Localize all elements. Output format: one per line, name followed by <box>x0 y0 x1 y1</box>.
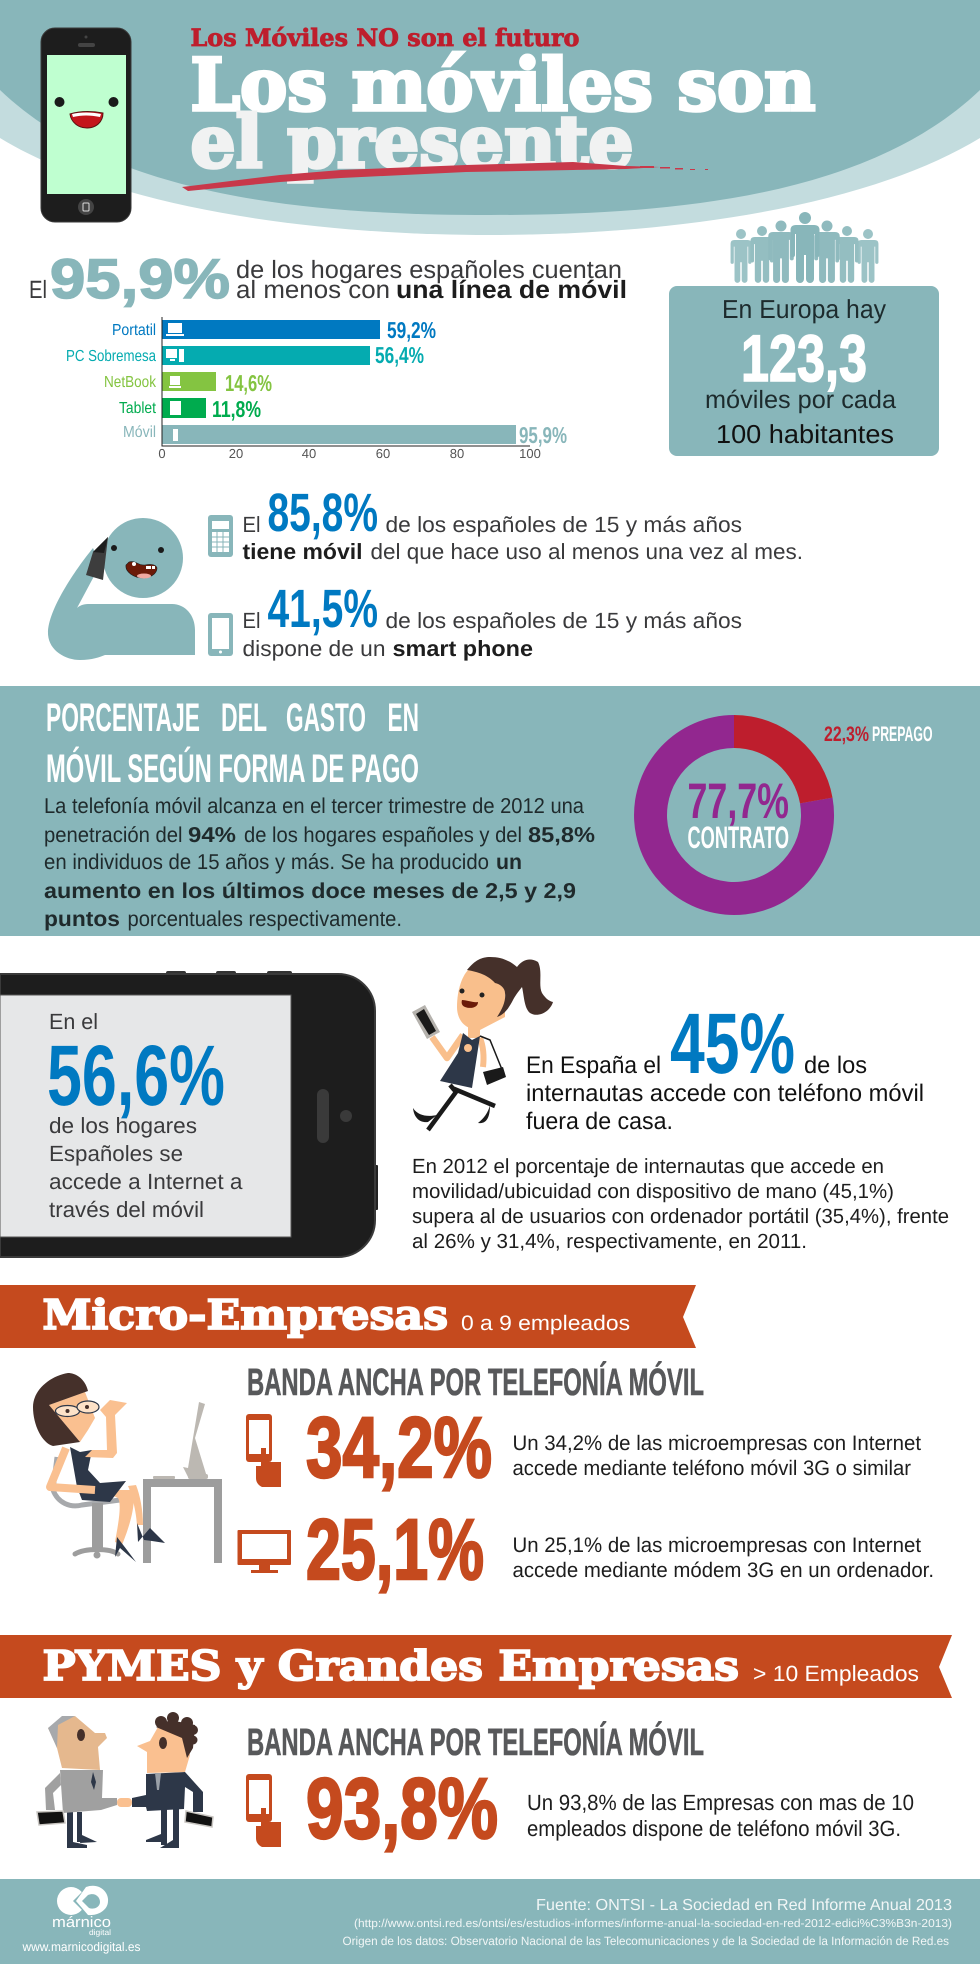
bar chart: devices: 0 <box>158 446 166 461</box>
bar chart: devices: 80 <box>450 446 464 461</box>
bar chart: devices: NetBook <box>104 374 157 391</box>
bar chart: devices: 100 <box>519 446 541 461</box>
bar chart: devices: Móvil <box>123 424 156 441</box>
bar chart: devices: 40 <box>302 446 316 461</box>
illustration: landscape phone <box>0 971 378 1257</box>
text block: 56,6% homes: 56,6% <box>47 1028 225 1124</box>
stat: 41,5% <box>242 579 742 661</box>
stat: 41,5%: dispone de un <box>242 636 386 661</box>
text block: 2012 comparison: En 2012 el porcentaje de internautas que accede en <box>412 1155 884 1178</box>
stat: 93,8%: 93,8% <box>306 1761 498 1857</box>
logo: marnico digital <box>22 1886 141 1954</box>
illustration: woman at desk <box>33 1373 222 1563</box>
stat: 41,5%: El <box>242 608 260 633</box>
panel: Europe stat: móviles por cada <box>705 386 896 414</box>
bar chart: devices: PC Sobremesa <box>66 348 156 365</box>
donut chart: contract vs prepaid: PREPAGO <box>872 723 932 746</box>
bar chart: devices: 20 <box>229 446 243 461</box>
panel: Europe stat: 123,3 <box>741 321 867 395</box>
text block: payment paragraph: 94% <box>188 823 236 847</box>
heading: payment type: MÓVIL SEGÚN FORMA DE PAGO <box>46 746 419 791</box>
text block: payment paragraph: La telefonía móvil alcanza en el tercer trimestre de 2012 una <box>44 794 584 818</box>
panel: Europe stat: 100 habitantes <box>716 419 894 449</box>
footer background <box>0 1879 980 1964</box>
icon: phone touch <box>246 1774 281 1847</box>
donut chart: contract vs prepaid <box>634 715 932 915</box>
donut chart: contract vs prepaid: CONTRATO <box>688 820 789 855</box>
stat: 41,5%: 41,5% <box>268 579 378 639</box>
bar chart: devices: Tablet <box>119 400 156 417</box>
text block: payment paragraph: 85,8% <box>528 823 595 847</box>
bar chart: devices: 59,2% <box>387 317 436 343</box>
icon: keypad phone <box>208 515 233 557</box>
bar chart: devices: 56,4% <box>375 342 424 368</box>
stat: 85,8%: El <box>242 512 260 537</box>
stat: 85,8% <box>242 483 803 564</box>
banner: Micro-Empresas: 0 a 9 empleados <box>461 1312 630 1335</box>
heading: payment type: GASTO <box>286 696 366 740</box>
panel: payment type background <box>0 686 980 936</box>
banner: Micro-Empresas: Micro-Empresas <box>42 1291 448 1339</box>
text block: PYMES phone <box>527 1790 914 1841</box>
bar chart: devices: 11,8% <box>212 396 261 422</box>
panel: Europe stat <box>669 286 939 456</box>
brush strike <box>182 162 708 191</box>
icon: smiling phone <box>41 28 131 222</box>
text block: payment paragraph: porcentuales respectivamente. <box>128 907 402 931</box>
text block: 45% outside the home: 45% <box>670 996 795 1092</box>
stat: 95,9% households: 95,9% <box>50 247 230 310</box>
text block: 56,6% homes: accede a Internet a <box>49 1169 243 1194</box>
heading: payment type: DEL <box>221 696 267 740</box>
banner: PYMES <box>0 1635 952 1698</box>
text block: payment paragraph: en individuos de 15 años y más. Se ha producido <box>44 850 489 874</box>
text block: microempresas modem: accede mediante módem 3G en un ordenador. <box>512 1559 934 1582</box>
icon: phone touch <box>246 1414 281 1487</box>
donut chart: contract vs prepaid: 22,3% <box>824 723 869 746</box>
illustration: walking woman <box>412 957 553 1130</box>
icon: smartphone <box>208 613 233 656</box>
heading: Banda ancha micro: BANDA ANCHA POR TELEFONÍA MÓVIL <box>247 1361 704 1404</box>
text block: microempresas phone: accede mediante teléfono móvil 3G o similar <box>512 1457 911 1480</box>
text block: sources: Origen de los datos: Observatorio Nacional de las Telecomunicaciones y de la Sociedad de la Información de Red.es <box>342 1934 949 1948</box>
bar chart: devices: Portatil <box>112 322 156 339</box>
text block: 2012 comparison: supera al de usuarios con ordenador portátil (35,4%), frente <box>412 1205 949 1228</box>
stat: 95,9% households: al menos con <box>236 276 390 304</box>
text block: microempresas modem <box>512 1534 934 1582</box>
text block: 2012 comparison: movilidad/ubicuidad con dispositivo de mano (45,1%) <box>412 1180 894 1203</box>
text block: 56,6% homes: través del móvil <box>49 1197 204 1222</box>
panel: Europe stat: En Europa hay <box>722 294 886 324</box>
subtitle: Los Móviles NO son el futuro <box>190 23 580 52</box>
illustration: person on the phone <box>48 518 195 660</box>
text block: 45% outside the home <box>526 996 924 1135</box>
text block: sources: Fuente: ONTSI - La Sociedad en Red Informe Anual 2013 <box>536 1897 952 1914</box>
text block: 2012 comparison: al 26% y 31,4%, respectivamente, en 2011. <box>412 1230 807 1253</box>
heading: payment type <box>46 696 419 791</box>
stat: 25,1%: 25,1% <box>306 1502 484 1598</box>
icon: monitor <box>238 1530 291 1573</box>
text block: 56,6% homes: de los hogares <box>49 1113 197 1138</box>
header background <box>0 0 980 235</box>
stat: 95,9% households <box>29 247 627 310</box>
stat: 95,9% households: una línea de móvil <box>396 276 627 304</box>
title line 2: el presente <box>190 99 634 184</box>
text block: payment paragraph: puntos <box>44 907 120 931</box>
heading: payment type: EN <box>388 696 419 740</box>
text block: sources: (http://www.ontsi.red.es/ontsi/es/estudios-informes/informe-anual-la-sociedad-en-red-2012-edici%C3%B3n-2013) <box>354 1918 952 1930</box>
stat: 95,9% households: de los hogares españoles cuentan <box>236 256 622 284</box>
text block: 45% outside the home: internautas accede con teléfono móvil <box>526 1080 924 1107</box>
donut chart: contract vs prepaid: 77,7% <box>688 773 789 829</box>
text block: PYMES phone: empleados dispone de teléfono móvil 3G. <box>527 1816 901 1841</box>
text block: 2012 comparison <box>412 1155 949 1253</box>
text block: sources <box>342 1897 952 1948</box>
text block: 56,6% homes: En el <box>49 1009 98 1034</box>
illustration: businessmen shaking hands <box>37 1712 213 1848</box>
text block: 56,6% homes: Españoles se <box>49 1141 183 1166</box>
stat: 41,5%: de los españoles de 15 y más años <box>386 608 742 633</box>
text block: microempresas phone <box>512 1432 921 1480</box>
heading: payment type: PORCENTAJE <box>46 696 200 740</box>
text block: 56,6% homes <box>47 1009 243 1222</box>
title line 1: Los móviles son <box>190 42 816 127</box>
stat: 85,8%: 85,8% <box>268 483 378 543</box>
text block: 45% outside the home: de los <box>804 1052 867 1079</box>
stat: 85,8%: del que hace uso al menos una vez al mes. <box>370 539 803 564</box>
text block: microempresas modem: Un 25,1% de las microempresas con Internet <box>512 1534 921 1557</box>
banner: PYMES: PYMES y Grandes Empresas <box>42 1642 739 1690</box>
stat: 41,5%: smart phone <box>392 636 533 661</box>
logo: marnico digital: digital <box>89 1928 111 1937</box>
bar chart: devices: 95,9% <box>519 422 567 448</box>
banner: PYMES: > 10 Empleados <box>753 1661 919 1686</box>
text block: PYMES phone: Un 93,8% de las Empresas con mas de 10 <box>527 1790 914 1815</box>
banner: Micro-Empresas <box>0 1285 696 1348</box>
icon: crowd of people <box>731 212 878 283</box>
stat: 34,2%: 34,2% <box>306 1400 492 1496</box>
text block: payment paragraph: penetración del <box>44 823 182 847</box>
text block: 45% outside the home: fuera de casa. <box>526 1108 673 1135</box>
stat: 95,9% households: El <box>29 276 47 304</box>
heading: Banda ancha PYMES: BANDA ANCHA POR TELEFONÍA MÓVIL <box>247 1721 704 1764</box>
text block: payment paragraph: un <box>496 850 522 874</box>
stat: 85,8%: tiene móvil <box>242 539 362 564</box>
bar chart: devices: 60 <box>376 446 390 461</box>
stat: 85,8%: de los españoles de 15 y más años <box>386 512 742 537</box>
bar chart: devices: 14,6% <box>225 370 272 396</box>
text block: microempresas phone: Un 34,2% de las microempresas con Internet <box>512 1432 921 1455</box>
bar chart: devices <box>66 317 567 461</box>
logo: marnico digital: www.marnicodigital.es <box>22 1940 141 1954</box>
text block: payment paragraph: aumento en los últimos doce meses de 2,5 y 2,9 <box>44 879 576 903</box>
text block: payment paragraph <box>44 794 595 931</box>
text block: 45% outside the home: En España el <box>526 1052 661 1079</box>
logo: marnico digital: márnico <box>52 1914 111 1931</box>
text block: payment paragraph: de los hogares españoles y del <box>244 823 522 847</box>
